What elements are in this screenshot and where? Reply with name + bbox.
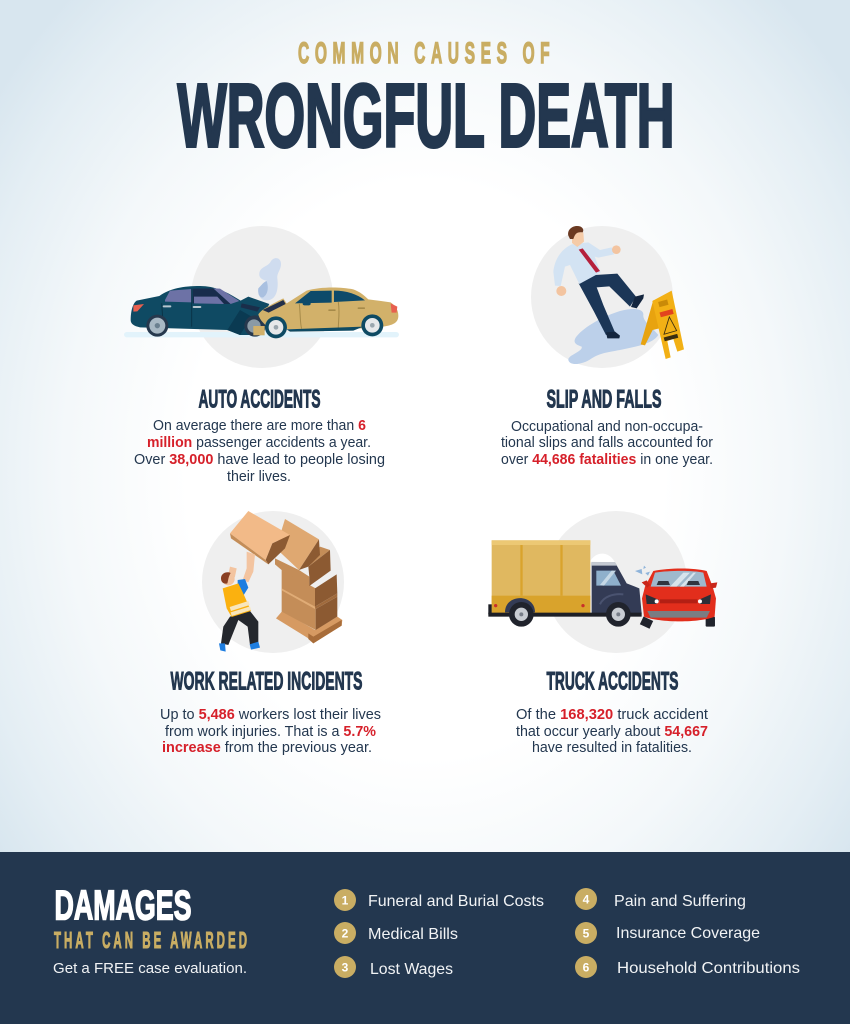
text: slip and falls: Occupational and non-occupa- (511, 419, 703, 435)
icon: truck hitting red car (488, 511, 717, 653)
list item 5 (575, 922, 760, 944)
text: truck accidents: Of the 168,320 truck accident (516, 707, 708, 723)
heading: damages: DAMAGES (54, 882, 192, 928)
icon: man slipping by caution sign (531, 226, 684, 368)
text: auto accidents: Over 38,000 have lead to people losing (134, 452, 385, 468)
icon: car crash (124, 226, 399, 368)
list item 6 (575, 956, 800, 978)
list item 4: Pain and Suffering (614, 893, 746, 910)
list item 1: Funeral and Burial Costs (368, 893, 544, 910)
list item 4: 4 (583, 892, 590, 906)
list item 3: Lost Wages (370, 961, 453, 978)
panel: work related incidents (160, 511, 381, 756)
text: free case evaluation: Get a FREE case evaluation. (53, 960, 247, 977)
subheading: that can be awarded: THAT CAN BE AWARDED (54, 928, 247, 953)
heading: truck accidents: TRUCK ACCIDENTS (546, 668, 678, 696)
icon: worker and falling boxes (202, 511, 344, 653)
text: auto accidents: million passenger accidents a year. (147, 435, 371, 451)
panel: damages footer (0, 852, 850, 1024)
panel: slip and falls (501, 226, 713, 468)
list item 1 (334, 889, 544, 911)
text: work related incidents (160, 707, 381, 756)
text: truck accidents: that occur yearly about 54,667 (516, 724, 708, 740)
list item 2: 2 (342, 926, 349, 940)
list item 5: Insurance Coverage (616, 925, 760, 942)
panel: truck accidents (488, 511, 717, 756)
text: slip and falls: over 44,686 fatalities in one year. (501, 452, 713, 468)
heading: slip and falls: SLIP AND FALLS (546, 386, 662, 414)
text: truck accidents: have resulted in fatalities. (532, 740, 692, 756)
text: work related incidents: Up to 5,486 workers lost their lives (160, 707, 381, 723)
list item 1: 1 (342, 894, 349, 908)
text: work related incidents: increase from the previous year. (162, 740, 372, 756)
text: auto accidents (134, 418, 385, 485)
list item 6: 6 (583, 960, 590, 974)
text: slip and falls (501, 419, 713, 468)
list item 3 (334, 956, 453, 978)
list item 4 (575, 888, 746, 910)
list item 2 (334, 922, 458, 944)
list item 5: 5 (583, 926, 590, 940)
heading: auto accidents: AUTO ACCIDENTS (198, 386, 320, 414)
heading: work related incidents: WORK RELATED INCIDENTS (170, 668, 362, 696)
subtitle: COMMON CAUSES OF (298, 37, 550, 71)
panel: auto accidents (124, 226, 399, 485)
text: work related incidents: from work injuries. That is a 5.7% (165, 724, 376, 740)
list item 3: 3 (342, 960, 349, 974)
list item 2: Medical Bills (368, 926, 458, 943)
list item 6: Household Contributions (617, 960, 800, 977)
text: slip and falls: tional slips and falls accounted for (501, 435, 713, 451)
text: auto accidents: their lives. (227, 469, 291, 485)
text: auto accidents: On average there are more than 6 (153, 418, 366, 434)
text: truck accidents (516, 707, 708, 756)
